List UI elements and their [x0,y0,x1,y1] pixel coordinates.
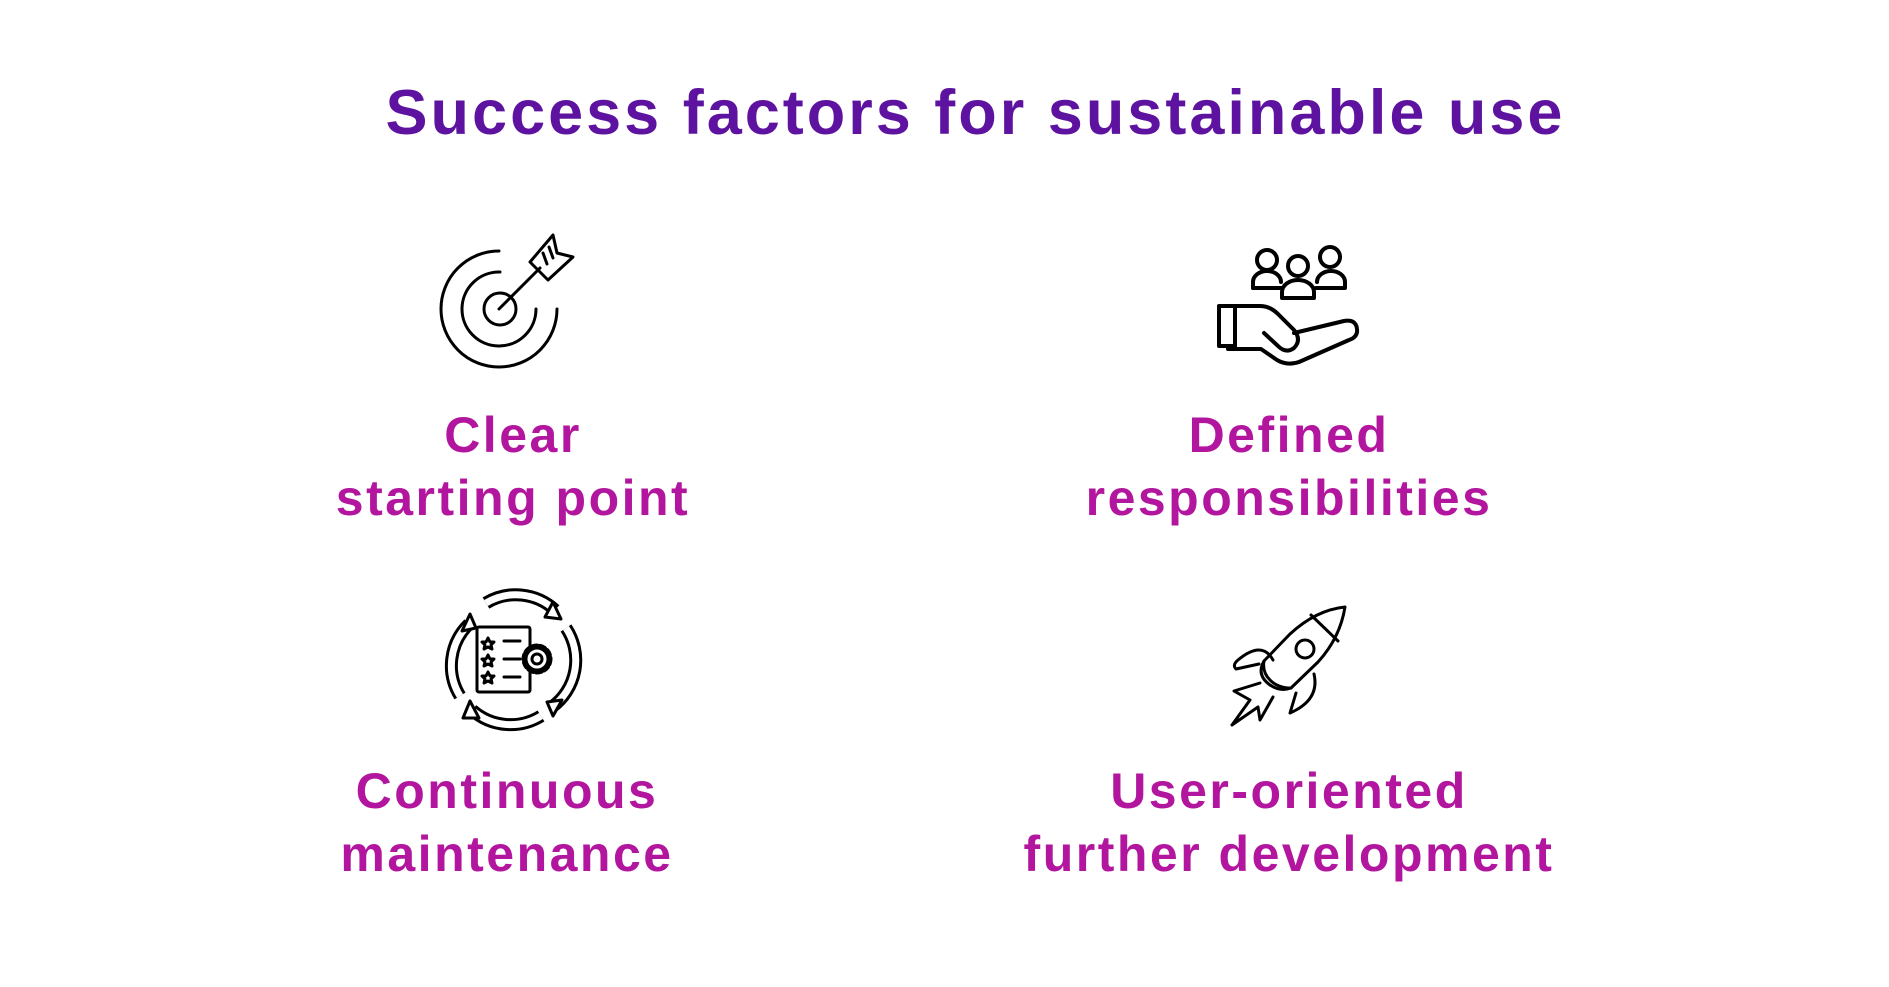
label: user-oriented further development: further development [1024,826,1554,882]
label: user-oriented further development [1024,763,1554,882]
title: Success factors for sustainable use [386,78,1565,148]
label: continuous maintenance [340,763,674,882]
label: clear starting point: Clear [444,407,582,463]
label: defined responsibilities [1086,407,1492,526]
label: continuous maintenance: Continuous [356,763,658,819]
label: clear starting point [336,407,690,526]
icon: continuous maintenance cycle [451,595,576,725]
label: defined responsibilities: responsibilities [1086,470,1492,526]
label: continuous maintenance: maintenance [340,826,674,882]
label: user-oriented further development: User-oriented [1110,763,1468,819]
label: defined responsibilities: Defined [1189,407,1389,463]
icon: rocket [1232,607,1345,725]
label: clear starting point: starting point [336,470,690,526]
icon: hand with people [1219,247,1357,364]
icon: target [441,235,573,367]
